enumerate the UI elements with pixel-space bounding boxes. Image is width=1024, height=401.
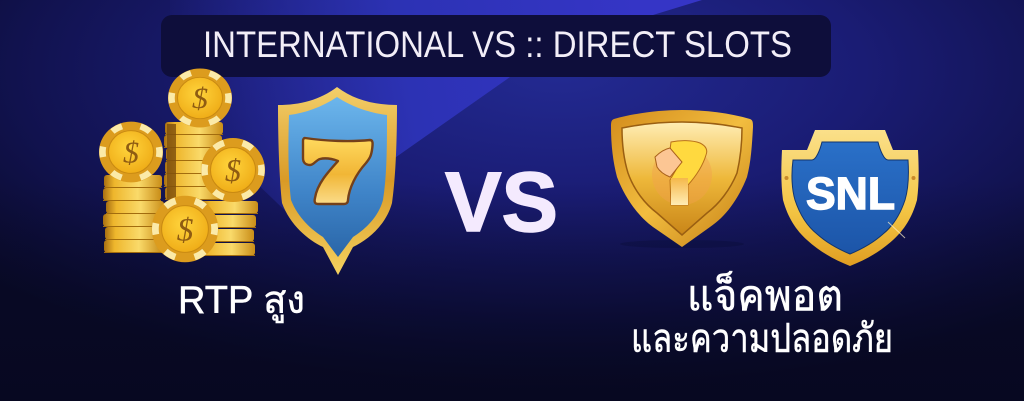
label: high RTP: RTP สูง [178,279,305,323]
right stack [196,201,258,256]
line one: แจ็คพอต [687,271,843,319]
title bar [161,15,831,77]
title bar: INTERNATIONAL VS :: DIRECT SLOTS [203,24,792,65]
coin: top [168,69,232,127]
icon: blue shield with seven [278,87,397,275]
icon: gold coin stacks [99,69,265,262]
icon: SNL shield [781,130,919,266]
left stack [103,175,164,252]
coin: left [99,122,163,182]
icon: SNL shield: SNL [806,168,895,219]
icon: gold shield [611,110,753,248]
label: jackpot and security [631,271,893,361]
coin: bottom [152,196,218,262]
vs label: VS [445,155,558,249]
coin: right [201,138,265,202]
line two: และความปลอดภัย [631,317,893,361]
center stack [164,122,224,200]
